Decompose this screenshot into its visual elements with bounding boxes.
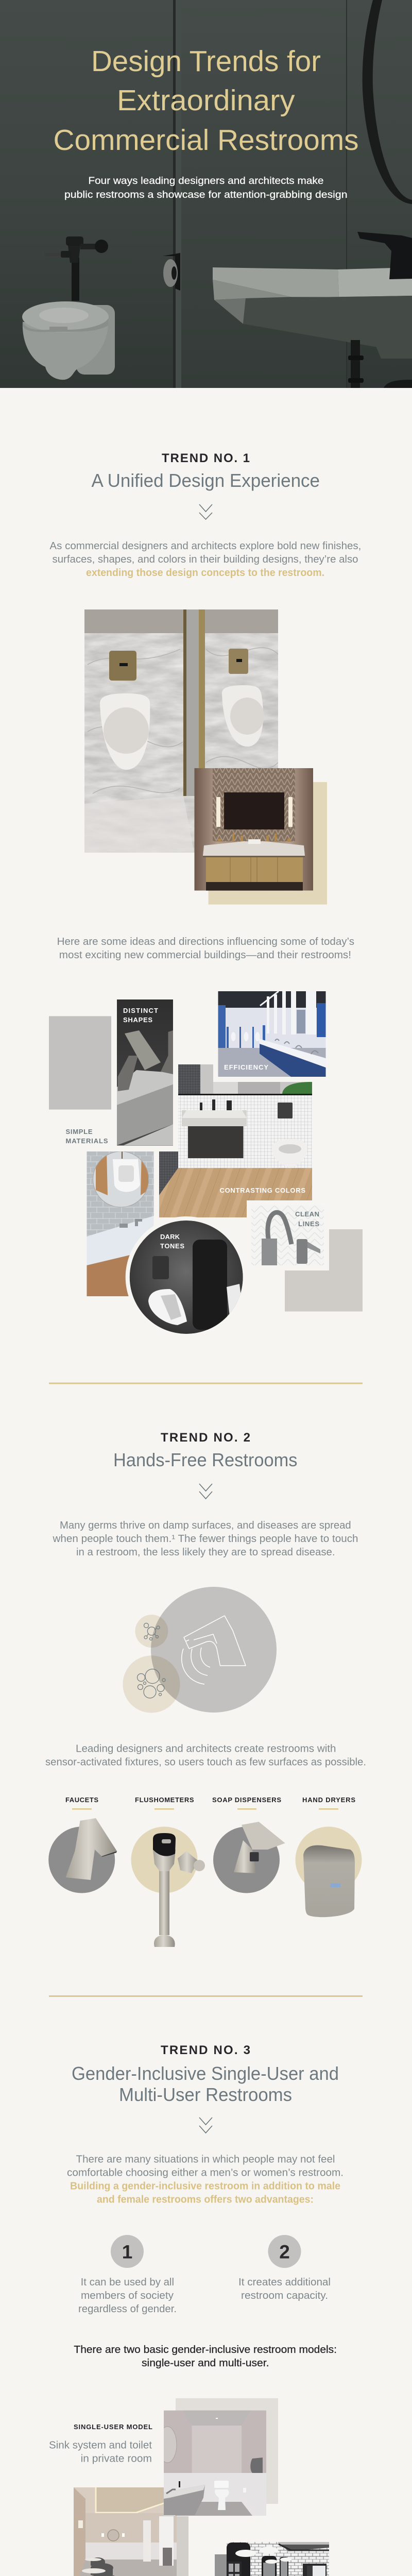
photo: clean lines faucet — [251, 1206, 324, 1265]
soap bubbles icon circle — [123, 1655, 180, 1713]
main title — [54, 45, 358, 157]
clean lines label: LINES — [298, 1220, 319, 1228]
decorative gold backing square — [209, 782, 327, 905]
divider rule — [49, 1383, 363, 1384]
divider rule — [49, 1995, 363, 1997]
trend 3 label: TREND NO. 3 — [161, 2043, 250, 2057]
trend 3 intro text: and female restrooms offers two advantages: — [97, 2194, 314, 2205]
single-user model label: SINGLE-USER MODEL — [74, 2423, 152, 2431]
advantage 1 — [78, 2235, 177, 2315]
backing square behind lounge photo — [86, 2516, 188, 2576]
single-user model description: Sink system and toilet — [49, 2440, 152, 2451]
dark tones label — [160, 1234, 184, 1248]
photo: lounge common area — [73, 2487, 183, 2576]
dark tones label: DARK — [160, 1233, 180, 1241]
collage of design ideas — [49, 991, 363, 1338]
trend 2 intro text: in a restroom, the less likely they are to spread disease. — [76, 1547, 335, 1558]
photo: round mirror with urinal reflection — [87, 1151, 153, 1296]
sensor fixtures text: Leading designers and architects create restrooms with — [76, 1743, 336, 1755]
subtitle — [64, 176, 347, 200]
advantage 1: members of society — [81, 2290, 174, 2301]
trend 3 heading: Multi-User Restrooms — [119, 2084, 292, 2105]
product: faucets: FAUCETS — [65, 1796, 98, 1804]
single-user model description: in private room — [81, 2453, 152, 2465]
photo: contrasting colors restroom — [159, 1064, 312, 1217]
product: flushometers: FLUSHOMETERS — [135, 1796, 194, 1804]
trend 1 intro text: As commercial designers and architects explore bold new finishes, — [49, 540, 361, 552]
product: faucets — [48, 1796, 117, 1893]
advantage 1: regardless of gender. — [78, 2303, 177, 2315]
advantage 1: It can be used by all — [81, 2277, 174, 2288]
trend 3 intro text — [67, 2154, 344, 2205]
advantage 1: 1 — [122, 2241, 132, 2263]
sensor fixtures text: sensor-activated fixtures, so users touch as few surfaces as possible. — [45, 1757, 366, 1768]
trend 1 intro text: extending those design concepts to the restroom. — [86, 567, 324, 579]
advantage 2 — [238, 2235, 331, 2301]
trend 2 intro text: Many germs thrive on damp surfaces, and diseases are spread — [60, 1520, 351, 1531]
trend 3 intro text: comfortable choosing either a men’s or women’s restroom. — [67, 2167, 344, 2178]
photo: distinct shapes faucet — [117, 999, 173, 1146]
main title: Commercial Restrooms — [54, 124, 358, 157]
trend 2 intro text — [52, 1520, 358, 1558]
simple materials label — [66, 1128, 108, 1145]
models intro text: single-user and multi-user. — [142, 2358, 269, 2369]
photo: efficiency blue restroom — [218, 991, 326, 1077]
clean lines label: CLEAN — [295, 1210, 319, 1218]
dark tones circular photo — [126, 1216, 247, 1338]
distinct shapes label — [123, 1008, 158, 1022]
trend 1 intro text — [49, 540, 361, 579]
models intro text — [74, 2344, 337, 2369]
photo: single-user restroom — [158, 2411, 266, 2516]
simple materials label: SIMPLE — [66, 1128, 93, 1136]
photo: vanity with gold fixtures — [195, 768, 313, 891]
subtitle: Four ways leading designers and architects make — [88, 176, 323, 187]
hands-free circle graphic — [123, 1587, 277, 1713]
trend 2 heading: Hands-Free Restrooms — [113, 1449, 298, 1470]
hero photo: dark restroom with toilet and sink — [0, 0, 412, 388]
contrasting colors label: CONTRASTING COLORS — [219, 1187, 305, 1194]
trend 3 heading — [72, 2063, 339, 2105]
single-user model description — [49, 2440, 152, 2465]
trend 2 intro text: when people touch them.¹ The fewer things people have to touch — [52, 1533, 358, 1545]
subtitle: public restrooms a showcase for attention-grabbing design — [64, 190, 347, 200]
trend 3 intro text: There are many situations in which people may not feel — [76, 2154, 335, 2165]
simple materials swatch — [49, 1016, 111, 1110]
photo: multi-user restroom — [227, 2542, 329, 2576]
product: hand dryers: HAND DRYERS — [302, 1796, 355, 1804]
trend 2 section — [45, 1431, 366, 1947]
backing square behind single-user photo — [176, 2398, 278, 2504]
big grey circle with faucet outline — [151, 1587, 277, 1713]
photo: brass urinals on marble — [84, 609, 278, 853]
product: soap dispensers — [212, 1796, 285, 1893]
distinct shapes label: SHAPES — [123, 1016, 152, 1024]
trend 1 heading: A Unified Design Experience — [92, 470, 320, 491]
sensor fixtures text — [45, 1743, 366, 1768]
trend 3 intro text: Building a gender-inclusive restroom in addition to male — [70, 2180, 340, 2192]
trend 1 label: TREND NO. 1 — [162, 451, 250, 465]
trend 3 section — [49, 2043, 348, 2576]
icon: double chevron — [199, 2117, 212, 2133]
advantage 2: It creates additional — [238, 2277, 331, 2288]
product: hand dryers — [296, 1796, 362, 1917]
second text block — [57, 936, 354, 961]
germ icon circle — [135, 1615, 168, 1648]
trend 1 intro text: surfaces, shapes, and colors in their building designs, they’re also — [53, 554, 358, 565]
decorative taupe L-shaped block — [285, 1229, 363, 1312]
simple materials label: MATERIALS — [66, 1137, 108, 1145]
second text block: most exciting new commercial buildings—and their restrooms! — [59, 950, 351, 961]
product: soap dispensers: SOAP DISPENSERS — [212, 1796, 281, 1804]
models intro text: There are two basic gender-inclusive restroom models: — [74, 2344, 337, 2355]
product: flushometers — [131, 1796, 205, 1947]
icon: double chevron — [199, 1484, 212, 1499]
hero banner — [0, 0, 412, 388]
trend 3 heading: Gender-Inclusive Single-User and — [72, 2063, 339, 2084]
trend 2 label: TREND NO. 2 — [161, 1431, 250, 1445]
trend 1 section — [49, 451, 363, 1338]
main title: Design Trends for — [91, 45, 321, 78]
distinct shapes label: DISTINCT — [123, 1007, 158, 1014]
efficiency label: EFFICIENCY — [224, 1063, 268, 1071]
dark tones label: TONES — [160, 1242, 184, 1250]
backing square behind multi-user photo — [215, 2554, 317, 2576]
main title: Extraordinary — [117, 84, 295, 117]
advantage 2: 2 — [279, 2241, 290, 2263]
advantage 2: restroom capacity. — [241, 2290, 328, 2301]
clean lines label — [296, 1212, 319, 1226]
icon: double chevron — [199, 504, 212, 519]
second text block: Here are some ideas and directions influencing some of today’s — [57, 936, 354, 947]
